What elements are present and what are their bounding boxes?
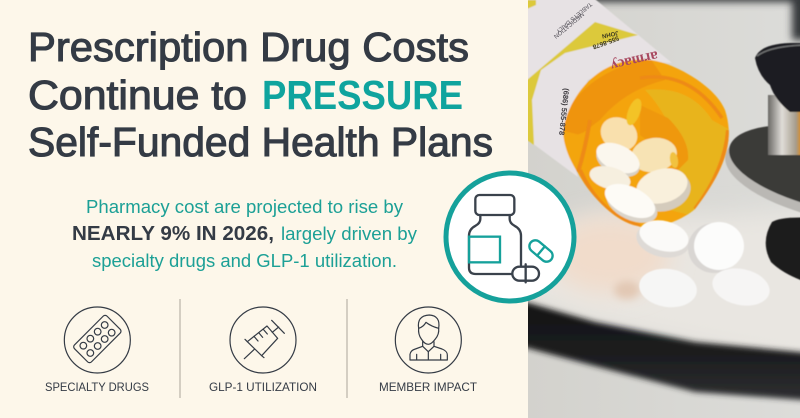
- title: [28, 24, 493, 165]
- intro paragraph: specialty drugs and GLP-1 utilization.: [92, 251, 397, 271]
- title: PRESSURE: [262, 72, 463, 118]
- white plate surface: [528, 214, 800, 350]
- icon: person: [395, 307, 461, 373]
- icon: blister pack: [64, 307, 130, 373]
- title: Continue to: [28, 72, 247, 118]
- pharmacy label printing: 555-8678: [591, 34, 620, 50]
- amber bottle opening: [563, 60, 729, 228]
- icon: medicine bottle badge: [446, 173, 574, 301]
- item: member impact: [379, 307, 478, 394]
- label: GLP-1 UTILIZATION: [209, 380, 317, 394]
- pharmacy label printing: [552, 0, 660, 136]
- stethoscope chest piece: [725, 42, 800, 212]
- pharmacy label printing: (686) 555-878: [557, 88, 571, 136]
- item: GLP-1 utilization: [209, 307, 317, 394]
- title: Self-Funded Health Plans: [28, 119, 493, 165]
- photo: pill bottle, tablets and stethoscope: [528, 0, 800, 418]
- warm reflection near bottle: [550, 217, 670, 293]
- loose tablets: [636, 219, 770, 308]
- divider lines: [180, 299, 347, 398]
- dark blurred edge at top of photo: [590, 0, 800, 40]
- label: MEMBER IMPACT: [379, 380, 478, 394]
- left cream panel: [0, 0, 528, 418]
- intro paragraph: [72, 197, 417, 271]
- item: specialty drugs: [45, 307, 149, 394]
- stethoscope tube, right: [766, 218, 800, 285]
- pill bottle: [520, 0, 730, 230]
- tablet shadow on plate: [614, 281, 640, 299]
- pharmacy label printing: armacy: [609, 47, 660, 74]
- label: SPECIALTY DRUGS: [45, 380, 149, 394]
- intro paragraph: Pharmacy cost are projected to rise by: [86, 197, 403, 217]
- tablets inside bottle: [600, 116, 638, 150]
- intro paragraph: largely driven by: [281, 224, 417, 244]
- pharmacy label printing: MEDICATION: [552, 10, 585, 39]
- stethoscope tube, foreground: [528, 300, 800, 404]
- photo backdrop: [528, 0, 800, 418]
- pharmacy label printing: TABLETS DAILY: [554, 0, 593, 34]
- yellow pharmacy sticker: [520, 22, 638, 145]
- bottle label: [520, 0, 672, 177]
- intro paragraph: NEARLY 9% IN 2026,: [72, 223, 274, 245]
- title: Prescription Drug Costs: [28, 24, 469, 70]
- amber shade inside bottle: [560, 58, 665, 135]
- icon: syringe: [230, 307, 296, 373]
- pharmacy label printing: JOHN: [601, 29, 619, 38]
